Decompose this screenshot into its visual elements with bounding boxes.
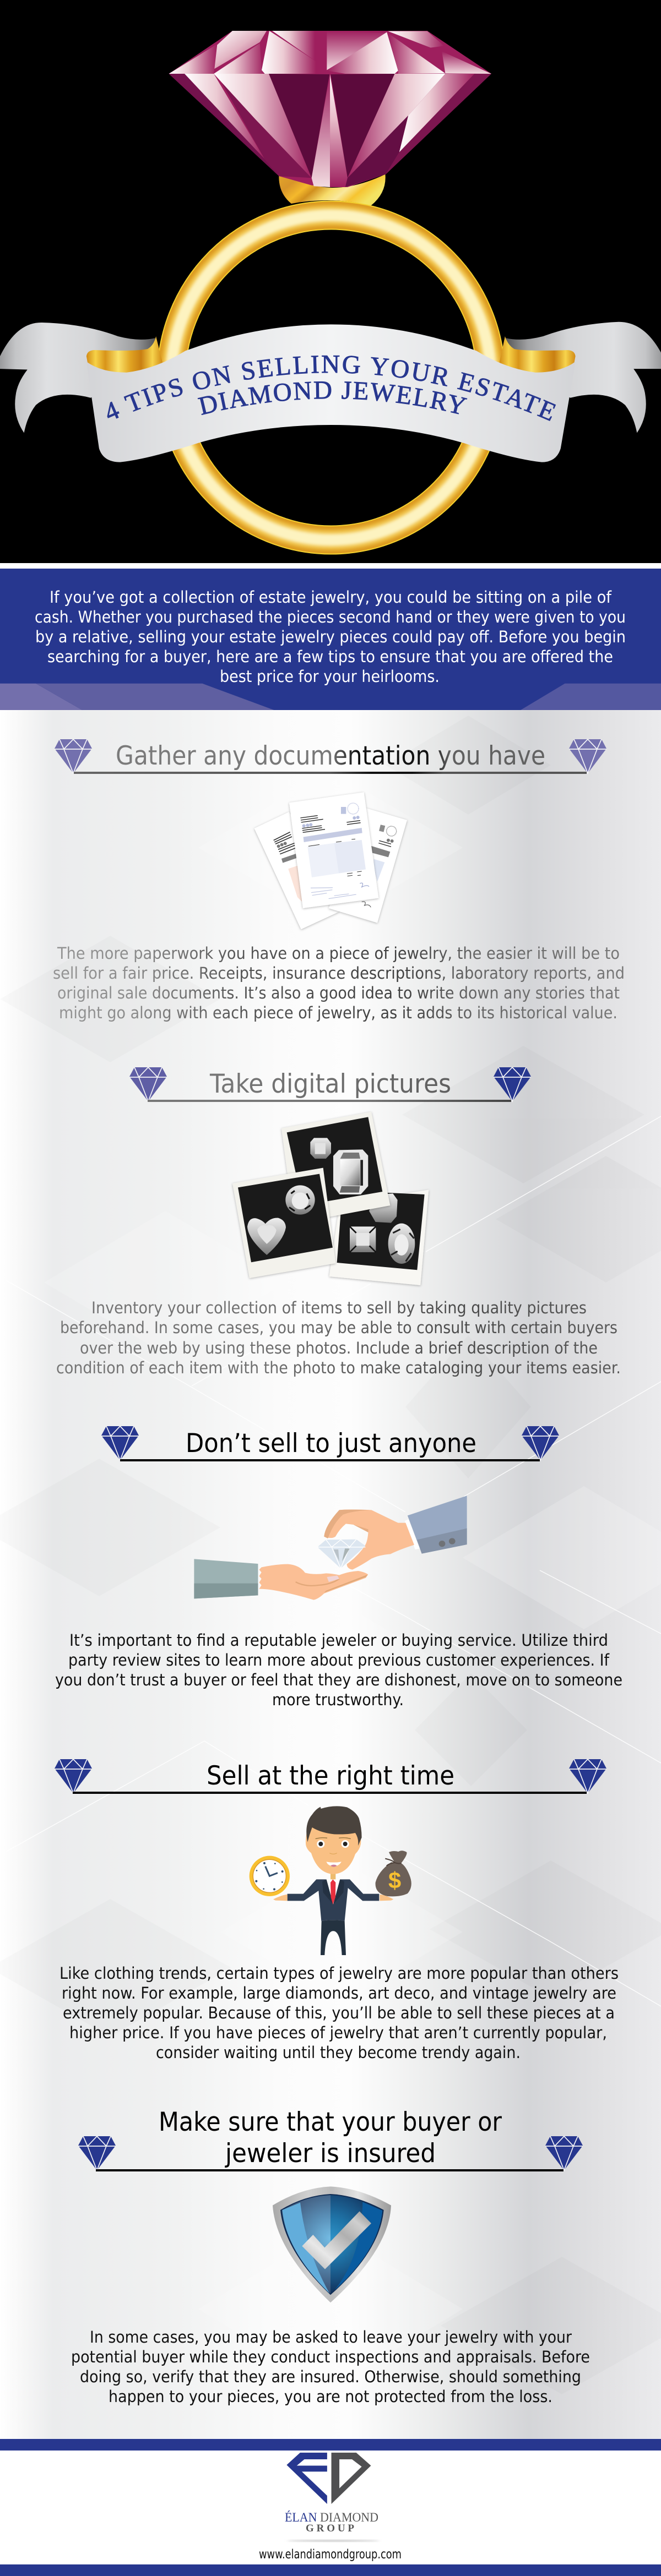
logo: Elan Diamond Group: ÉLAN DIAMOND <box>285 2510 378 2524</box>
body text: consider waiting until they become trendy again. <box>156 2043 521 2062</box>
body text <box>55 1631 622 1709</box>
icon: diamond right <box>569 739 606 773</box>
icon: diamond left <box>129 1067 167 1101</box>
icon: diamond left <box>78 2136 116 2170</box>
intro text: cash. Whether you purchased the pieces second hand or they were given to you <box>35 608 626 626</box>
icon: diamond left <box>55 739 92 773</box>
body text <box>71 2328 590 2406</box>
heading underline <box>73 1792 587 1794</box>
body text: right now. For example, large diamonds, art deco, and vintage jewelry are <box>62 1984 616 2002</box>
intro text <box>35 588 626 686</box>
icon: diamond right <box>494 1067 531 1101</box>
section 4: sell at the right time <box>55 1759 619 2062</box>
icon: ribbon tails <box>0 322 661 433</box>
icon: diamond right <box>569 1759 606 1793</box>
icon: gold ribbon folds <box>86 336 576 380</box>
heading underline <box>96 2169 564 2171</box>
image: polaroid photos of gems <box>232 1112 429 1285</box>
intro text: by a relative, selling your estate jewelry pieces could pay off. Before you begin <box>35 627 626 646</box>
body text: extremely popular. Because of this, you’ll be able to sell these pieces at a <box>63 2004 615 2022</box>
image: hands passing a diamond <box>194 1496 467 1600</box>
body text <box>53 944 625 1022</box>
section 1: gather documentation <box>53 739 625 1022</box>
body text <box>59 1964 619 2062</box>
logo: Elan Diamond Group: GROUP <box>306 2523 354 2534</box>
body text: potential buyer while they conduct inspections and appraisals. Before <box>71 2348 590 2366</box>
heading: Gather any documentation you have <box>116 741 545 771</box>
icon: silver banner <box>86 324 576 462</box>
icon: diamond left <box>55 1759 92 1793</box>
icon: ring setting <box>279 174 386 205</box>
body text: condition of each item with the photo to make cataloging your items easier. <box>56 1358 621 1377</box>
body text: party review sites to learn more about previous customer experiences. If <box>68 1651 610 1669</box>
image: businessman with clock and money bag: $ <box>388 1868 401 1893</box>
body text: doing so, verify that they are insured. Otherwise, should something <box>80 2367 581 2386</box>
body text: over the web by using these photos. Include a brief description of the <box>80 1339 598 1357</box>
intro text: best price for your heirlooms. <box>220 667 440 686</box>
section 5: insured buyer <box>71 2107 590 2406</box>
heading underline <box>74 772 587 774</box>
heading underline <box>120 1459 540 1461</box>
icon: pink diamond <box>169 31 491 187</box>
icon: shield with check mark <box>273 2186 391 2302</box>
heading: Make sure that your buyer or <box>159 2107 502 2137</box>
body text: you don’t trust a buyer or feel that they are dishonest, move on to someone <box>55 1671 622 1689</box>
section 2: digital pictures <box>56 1067 621 1377</box>
body text: Like clothing trends, certain types of jewelry are more popular than others <box>59 1964 619 1983</box>
title: DIAMOND JEWELRY <box>197 381 467 415</box>
website url: www.elandiamondgroup.com <box>259 2547 402 2562</box>
body text: more trustworthy. <box>272 1690 404 1709</box>
intro text: searching for a buyer, here are a few tips to ensure that you are offered the <box>47 647 613 666</box>
body text <box>56 1298 621 1377</box>
icon: diamond right <box>545 2136 583 2170</box>
image: invoices <box>254 792 407 929</box>
heading: Don’t sell to just anyone <box>186 1428 476 1459</box>
body text: The more paperwork you have on a piece of jewelry, the easier it will be to <box>57 944 620 963</box>
panel: black header with ring <box>0 0 661 563</box>
title: 4 TIPS ON SELLING YOUR ESTATE <box>107 356 556 421</box>
logo: Elan Diamond Group <box>285 2453 380 2542</box>
image: businessman with clock and money bag <box>250 1806 411 1955</box>
heading: Take digital pictures <box>209 1069 451 1099</box>
body text: In some cases, you may be asked to leave your jewelry with your <box>90 2328 572 2346</box>
body text: happen to your pieces, you are not protected from the loss. <box>109 2387 552 2406</box>
heading <box>159 2107 502 2169</box>
section 3: don't sell to just anyone <box>55 1426 622 1709</box>
panel: intro band <box>0 569 661 710</box>
icon: diamond right <box>522 1426 559 1460</box>
heading underline <box>148 1100 511 1102</box>
icon: gold ring <box>171 215 491 540</box>
intro text: If you’ve got a collection of estate jewelry, you could be sitting on a pile of <box>50 588 612 607</box>
icon: diamond left <box>101 1426 139 1460</box>
heading: jeweler is insured <box>225 2138 436 2169</box>
body text: It’s important to find a reputable jeweler or buying service. Utilize third <box>69 1631 608 1650</box>
heading: Sell at the right time <box>207 1761 454 1791</box>
body text: Inventory your collection of items to sell by taking quality pictures <box>91 1298 587 1317</box>
body text: sell for a fair price. Receipts, insurance descriptions, laboratory reports, and <box>53 964 625 983</box>
body text: higher price. If you have pieces of jewelry that aren’t currently popular, <box>69 2023 607 2042</box>
body text: beforehand. In some cases, you may be able to consult with certain buyers <box>60 1318 617 1337</box>
body text: might go along with each piece of jewelry, as it adds to its historical value. <box>59 1003 617 1022</box>
body text: original sale documents. It’s also a good idea to write down any stories that <box>57 984 620 1002</box>
panel: tips background <box>0 710 661 2439</box>
panel: footer <box>0 2439 661 2576</box>
